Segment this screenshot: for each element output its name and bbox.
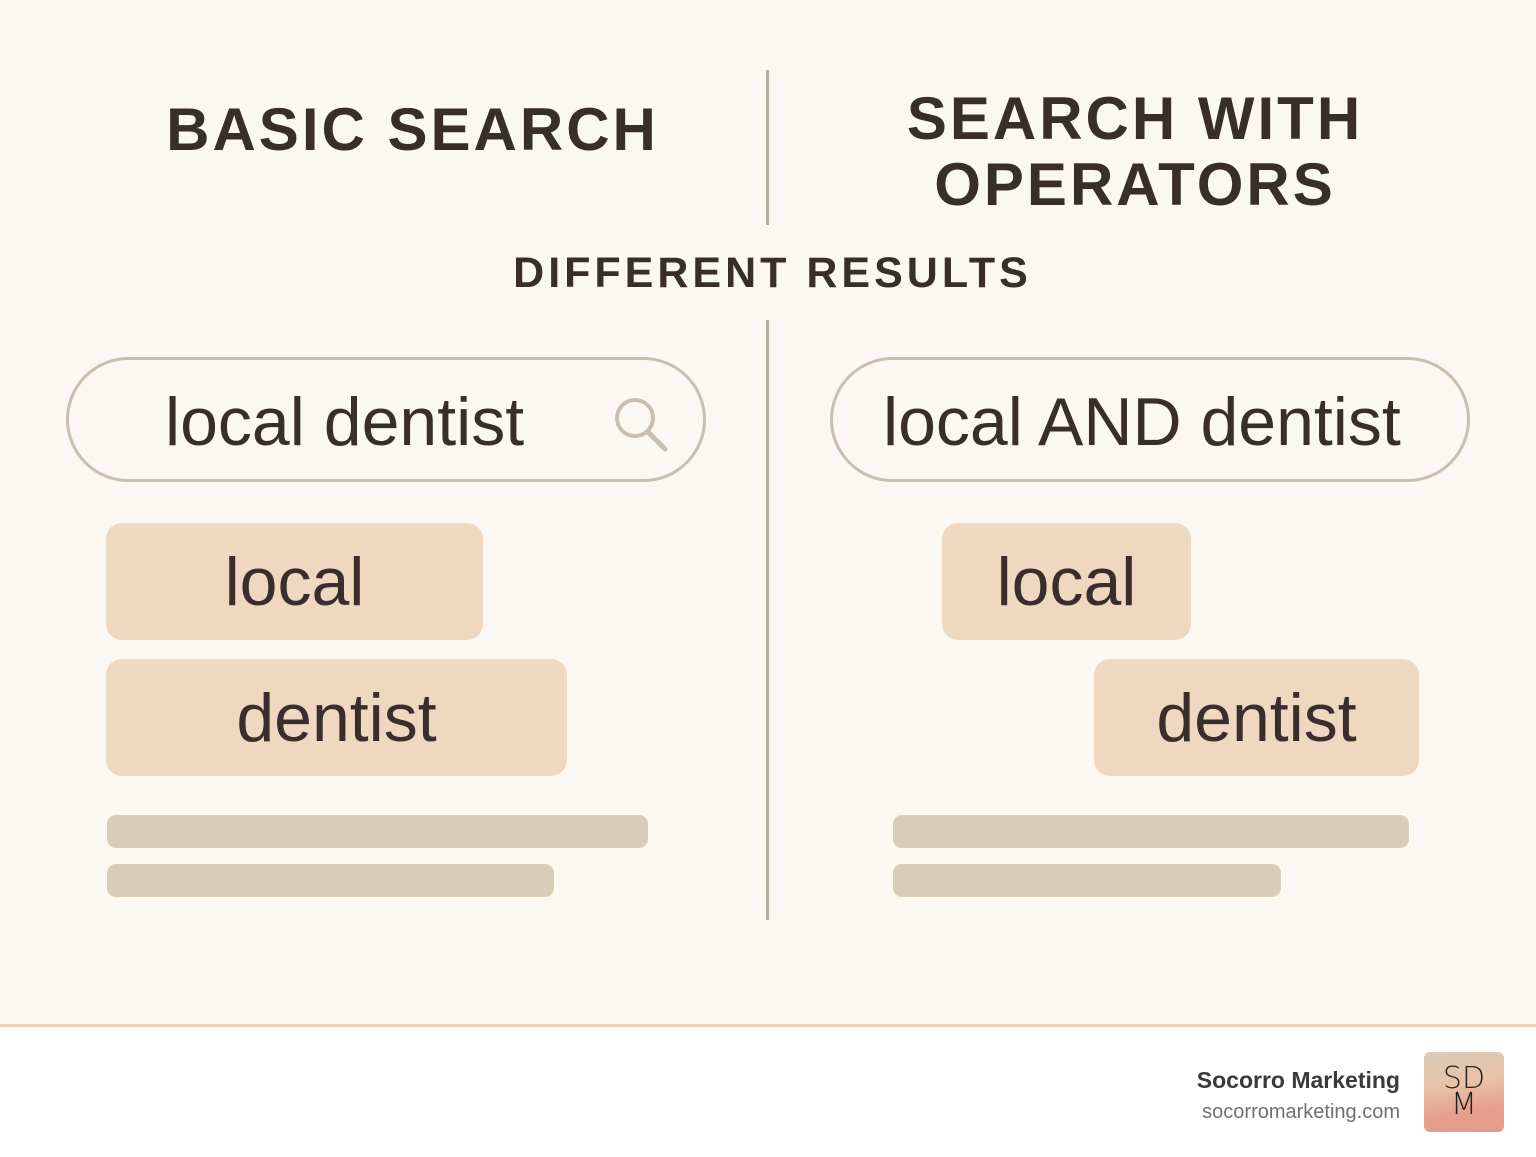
chip: local (operators): local — [997, 544, 1136, 620]
chip: dentist (operators): dentist — [1156, 680, 1357, 756]
result bars: operators — [893, 815, 1409, 897]
chip: dentist (basic) — [106, 659, 567, 776]
result bars: basic — [107, 815, 648, 897]
chip: local (operators) — [942, 523, 1191, 640]
chip: local (basic): local — [225, 544, 364, 620]
heading: basic search: BASIC SEARCH — [166, 96, 659, 163]
chip: local (basic) — [106, 523, 483, 640]
divider bottom — [766, 320, 769, 920]
brand url: socorromarketing.com — [1202, 1101, 1400, 1123]
heading: different results: DIFFERENT RESULTS — [513, 249, 1032, 297]
footer — [0, 1024, 1536, 1157]
chip: dentist (basic): dentist — [236, 680, 437, 756]
brand name: Socorro Marketing — [1197, 1067, 1400, 1093]
query text: local dentist — [165, 384, 524, 460]
heading: search with operators: OPERATORS — [934, 151, 1336, 218]
heading: search with operators — [907, 85, 1363, 218]
logo — [1424, 1052, 1504, 1132]
icon: magnifier — [615, 398, 668, 452]
search box: basic — [66, 357, 706, 482]
logo: M — [1451, 1087, 1477, 1122]
logo: SD — [1443, 1061, 1485, 1096]
search box: operators — [830, 357, 1470, 482]
chip: dentist (operators) — [1094, 659, 1419, 776]
divider top — [766, 70, 769, 225]
heading: search with operators: SEARCH WITH — [907, 85, 1363, 152]
query text: local AND dentist — [883, 384, 1401, 460]
